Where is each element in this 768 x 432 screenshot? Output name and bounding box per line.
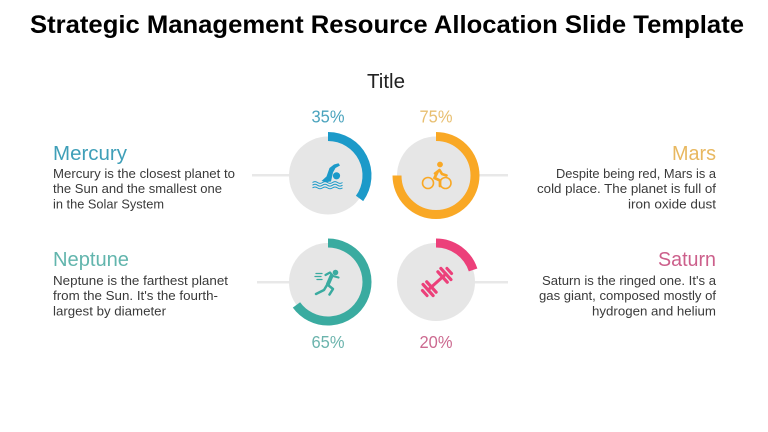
donut: neptune 65% bbox=[289, 243, 367, 321]
panel: mercury text: Mercury is the closest planet to bbox=[53, 166, 235, 181]
panel: neptune text: Neptune is the farthest planet bbox=[53, 273, 228, 288]
connector: mars bbox=[478, 174, 508, 176]
donut: mars 75% bbox=[397, 136, 475, 214]
label: 35%: 35% bbox=[312, 106, 344, 126]
connector: saturn bbox=[474, 281, 508, 284]
panel: mercury text: Mercury bbox=[53, 142, 128, 165]
panel: mercury text bbox=[53, 142, 235, 212]
icon: dumbbell bbox=[420, 265, 454, 299]
panel: neptune text: largest by diameter bbox=[53, 304, 167, 318]
panel: saturn text: gas giant, composed mostly of bbox=[539, 288, 716, 303]
label: 65%: 65% bbox=[312, 332, 344, 352]
label: 20%: 20% bbox=[420, 332, 452, 352]
icon: runner bbox=[315, 270, 338, 294]
panel: mars text: Mars bbox=[672, 142, 716, 165]
label: 75%: 75% bbox=[420, 106, 452, 126]
connector: mercury bbox=[252, 174, 290, 176]
donut: mercury 35% bbox=[289, 136, 367, 214]
panel: saturn text: hydrogen and helium bbox=[592, 304, 716, 318]
panel: mars text: iron oxide dust bbox=[628, 196, 716, 212]
icon: cyclist bbox=[422, 162, 451, 188]
panel: saturn text bbox=[539, 248, 717, 318]
panel: neptune text bbox=[53, 248, 228, 318]
title: Strategic Management Resource Allocation Slide Template bbox=[30, 12, 744, 39]
subtitle: Title bbox=[367, 71, 405, 93]
donut: saturn 20% bbox=[397, 243, 475, 321]
panel: saturn text: Saturn bbox=[658, 248, 716, 271]
panel: neptune text: Neptune bbox=[53, 248, 129, 271]
panel: mercury text: in the Solar System bbox=[53, 196, 164, 212]
icon: swimmer bbox=[312, 163, 342, 189]
panel: saturn text: Saturn is the ringed one. It's a bbox=[542, 273, 717, 288]
panel: mars text: cold place. The planet is full of bbox=[537, 181, 716, 196]
panel: mercury text: the Sun and the smallest one bbox=[53, 181, 222, 196]
panel: mars text bbox=[537, 142, 717, 212]
panel: neptune text: from the Sun. It's the fourth- bbox=[53, 288, 218, 303]
panel: mars text: Despite being red, Mars is a bbox=[556, 166, 717, 181]
connector: neptune bbox=[257, 281, 290, 284]
